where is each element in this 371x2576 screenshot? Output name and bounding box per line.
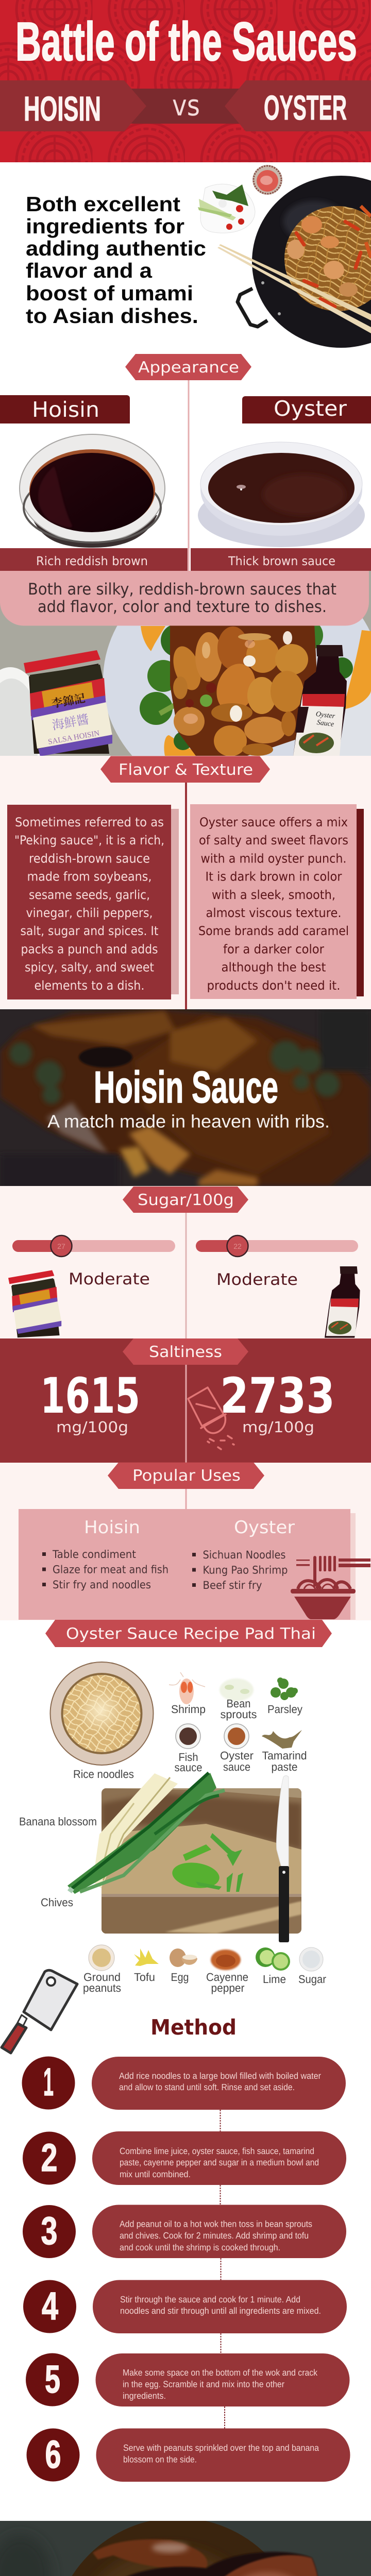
slider: oyster sugar: 22 xyxy=(233,1242,242,1250)
step 1 xyxy=(22,2057,346,2110)
intro text: Both excellent xyxy=(26,192,180,216)
hoisin column heading: Hoisin xyxy=(84,1517,140,1538)
hoisin description card: "Peking sauce", it is a rich, xyxy=(14,833,164,848)
ingredient: tofu xyxy=(134,1948,159,1984)
hoisin caption xyxy=(0,548,188,571)
oyster salt value: 2733 xyxy=(220,1368,335,1425)
oyster description card: for a darker color xyxy=(223,942,324,956)
step card: Serve with peanuts sprinkled over the top and banana xyxy=(123,2443,319,2453)
hoisin uses list: Stir fry and noodles xyxy=(53,1579,151,1591)
section banner: recipe xyxy=(45,1620,332,1647)
icon: herb plate xyxy=(198,184,255,233)
bottle: oyster sauce xyxy=(293,645,347,756)
hoisin salt value: 1615 xyxy=(40,1368,140,1425)
oyster description card: with a sleek, smooth, xyxy=(212,888,335,902)
ingredient: egg: Egg xyxy=(171,1971,189,1984)
jar: hoisin sauce small xyxy=(8,1270,61,1337)
step connectors xyxy=(221,2110,225,2429)
ingredient: oyster sauce: Oyster xyxy=(220,1749,254,1762)
step card: ingredients. xyxy=(123,2391,166,2401)
slider: hoisin sugar xyxy=(12,1235,175,1257)
jar product name: SALSA HOISIN xyxy=(47,729,100,747)
oyster uses list: Sichuan Noodles xyxy=(203,1549,285,1561)
ingredient: cayenne pepper: Cayenne xyxy=(206,1971,248,1984)
ingredient: fish sauce: Fish xyxy=(178,1751,198,1764)
bottle label: Sauce xyxy=(316,719,334,728)
ingredient: oyster sauce xyxy=(220,1724,254,1773)
hoisin label: HOISIN xyxy=(24,90,101,128)
section banner xyxy=(108,1463,264,1489)
ingredient: tamarind paste: Tamarind xyxy=(262,1749,307,1762)
step number: 5 xyxy=(45,2358,60,2401)
oyster caption xyxy=(191,548,371,571)
uses card xyxy=(19,1509,356,1620)
bottle: oyster sauce small xyxy=(325,1266,360,1338)
ingredient: banana blossom xyxy=(93,1773,178,1888)
hoisin caption: Rich reddish brown xyxy=(36,554,148,568)
step card xyxy=(96,2429,350,2482)
jar: hoisin sauce xyxy=(24,650,112,756)
icon: chopsticks xyxy=(217,244,371,333)
step number: 3 xyxy=(41,2209,58,2253)
ingredient: lime: Lime xyxy=(263,1973,286,1986)
oyster description card: although the best xyxy=(222,960,326,975)
step card: blossom on the side. xyxy=(123,2454,197,2465)
hoisin uses list: Table condiment xyxy=(52,1548,136,1561)
broccoli xyxy=(140,625,353,750)
intro text: flavor and a xyxy=(26,259,153,282)
step 5 xyxy=(26,2353,349,2406)
step 6 xyxy=(27,2429,350,2482)
ingredient: ground peanuts xyxy=(83,1945,121,1994)
section: sugar per 100g xyxy=(0,1186,371,1338)
divider xyxy=(185,1213,187,1338)
oyster description card: almost viscous texture. xyxy=(206,906,341,920)
oyster description card: Oyster sauce offers a mix xyxy=(199,815,348,829)
ingredient: tamarind paste: paste xyxy=(271,1760,298,1773)
section banner xyxy=(100,756,270,783)
section banner: Flavor & Texture xyxy=(119,761,253,779)
step card: Add peanut oil to a hot wok then toss in bean sprouts xyxy=(120,2218,312,2229)
ingredient: bean sprouts: Bean xyxy=(227,1697,250,1710)
summary text xyxy=(28,580,336,616)
step card: and cook until the shrimp is cooked through. xyxy=(120,2242,280,2252)
ingredient: fish sauce xyxy=(174,1724,202,1774)
jar label: 海鮮醬 xyxy=(51,713,90,733)
bottle label: Oyster xyxy=(315,710,335,720)
ingredient: sugar: Sugar xyxy=(298,1973,326,1986)
step card xyxy=(92,2057,346,2110)
intro text: to Asian dishes. xyxy=(26,304,198,328)
section banner: Sugar/100g xyxy=(138,1191,234,1209)
step card: noodles and stir through until all ingredients are mixed. xyxy=(120,2306,321,2316)
step number: 1 xyxy=(43,2060,54,2104)
heading: Hoisin Sauce xyxy=(94,1062,278,1112)
icon: chili dip dish xyxy=(252,165,282,195)
step card: Add rice noodles to a large bowl filled with boiled water xyxy=(119,2071,321,2081)
step number xyxy=(22,2057,75,2109)
label: banana blossom: Banana blossom xyxy=(19,1815,97,1828)
section banner: Saltiness xyxy=(149,1343,222,1361)
hoisin description card: Sometimes referred to as xyxy=(15,815,164,829)
ingredient: sugar xyxy=(298,1947,326,1986)
section banner xyxy=(123,1187,248,1213)
ingredient: ground peanuts: peanuts xyxy=(83,1981,121,1994)
section banner: recipe: Oyster Sauce Recipe Pad Thai xyxy=(66,1625,316,1643)
vs label: vs xyxy=(172,89,200,123)
step number xyxy=(23,2280,76,2333)
oyster salt unit: mg/100g xyxy=(242,1418,314,1436)
hoisin description card: salt, sugar and spices. It xyxy=(21,924,159,938)
step number xyxy=(23,2205,76,2258)
step number xyxy=(26,2353,79,2406)
ingredient: egg xyxy=(170,1948,197,1984)
heading: method: Method xyxy=(150,2015,237,2040)
hoisin uses list xyxy=(42,1548,168,1591)
oyster description card xyxy=(190,804,364,999)
photo: chicken dish with sauces xyxy=(0,571,371,756)
oyster caption: Thick brown sauce xyxy=(228,554,335,568)
photo: oyster sauce white dish xyxy=(197,442,367,548)
ingredient: tofu: Tofu xyxy=(134,1971,155,1984)
step number: 6 xyxy=(45,2433,61,2477)
subheading: A match made in heaven with ribs. xyxy=(47,1112,330,1131)
step number xyxy=(27,2429,79,2481)
ingredient: ground peanuts: Ground xyxy=(83,1971,121,1984)
oyster description card: of salty and sweet flavors xyxy=(199,833,348,848)
oyster uses list: Beef stir fry xyxy=(203,1579,262,1591)
ingredient: oyster sauce: sauce xyxy=(223,1760,250,1773)
step card: Make some space on the bottom of the wok and crack xyxy=(123,2367,317,2378)
ingredient: parsley xyxy=(267,1677,302,1716)
jar brand: 李錦記 xyxy=(50,692,86,710)
step number: 2 xyxy=(41,2136,58,2180)
step 4 xyxy=(23,2280,347,2333)
hoisin description card: reddish-brown sauce xyxy=(29,851,150,866)
ingredient: lime xyxy=(256,1947,290,1986)
step card xyxy=(92,2205,346,2258)
ingredient: rice noodles xyxy=(50,1662,154,1781)
bowl of rice xyxy=(0,667,44,756)
ingredient: bean sprouts: sprouts xyxy=(221,1708,257,1721)
intro text: ingredients for xyxy=(26,214,184,238)
oyster uses list xyxy=(192,1549,288,1591)
hoisin description card: vinegar, chili peppers, xyxy=(26,906,153,920)
chopped chives xyxy=(171,1833,243,1892)
section: popular uses xyxy=(0,1463,371,1620)
section: saltiness xyxy=(0,1338,371,1463)
oyster tab: Oyster xyxy=(274,396,347,421)
cutting board xyxy=(102,1788,301,1934)
icon: cleaver xyxy=(2,1970,77,2053)
section: flavor and texture xyxy=(0,756,371,1009)
section banner xyxy=(123,1338,248,1365)
step card: and chives. Cook for 2 minutes. Add shrimp and tofu xyxy=(120,2230,309,2241)
slider: hoisin sugar: 27 xyxy=(57,1242,65,1250)
oyster description card: It is dark brown in color xyxy=(205,870,342,884)
step 3 xyxy=(23,2205,346,2258)
summary text: Both are silky, reddish-brown sauces that xyxy=(28,580,336,599)
hoisin uses list: Glaze for meat and fish xyxy=(53,1563,168,1575)
hoisin description card: elements to a dish. xyxy=(34,978,144,993)
ingredient: bean sprouts xyxy=(220,1679,257,1721)
hoisin description card xyxy=(7,805,179,999)
step card: in the egg. Scramble it and mix into the other xyxy=(123,2379,284,2389)
icon: salt shaker xyxy=(188,1387,234,1449)
summary text: add flavor, color and texture to dishes. xyxy=(38,598,327,616)
oyster uses list: Kung Pao Shrimp xyxy=(203,1564,288,1577)
section banner xyxy=(125,354,251,380)
ingredient: cayenne pepper xyxy=(206,1950,248,1994)
step card: Stir through the sauce and cook for 1 minute. Add xyxy=(120,2294,300,2304)
versus ribbon xyxy=(0,80,371,131)
divider xyxy=(185,783,187,1009)
intro text: boost of umami xyxy=(26,281,193,305)
oyster description card: Some brands add caramel xyxy=(198,924,349,938)
hoisin tab xyxy=(0,395,130,423)
divider xyxy=(185,1489,187,1510)
chicken pieces xyxy=(168,623,317,756)
divider xyxy=(185,1365,187,1463)
ingredient: parsley: Parsley xyxy=(267,1703,302,1716)
label: chives: Chives xyxy=(41,1896,73,1909)
oyster description card: products don't need it. xyxy=(207,978,340,993)
oranges xyxy=(141,626,371,756)
step number xyxy=(23,2132,76,2184)
step card xyxy=(96,2353,349,2406)
divider xyxy=(188,380,190,571)
ingredient: fish sauce: sauce xyxy=(174,1761,202,1774)
intro text xyxy=(26,192,206,328)
pink summary panel xyxy=(0,571,369,625)
hoisin description card: sesame seeds, garlic, xyxy=(29,888,150,902)
step card xyxy=(93,2280,347,2333)
slider: oyster sugar xyxy=(196,1235,358,1257)
photo: glazed ribs xyxy=(0,1009,371,1190)
hoisin description card: spicy, salty, and sweet xyxy=(25,960,154,975)
section banner: Popular Uses xyxy=(132,1467,241,1485)
step 2 xyxy=(23,2131,346,2185)
section banner: Appearance xyxy=(138,359,239,377)
oyster rating: Moderate xyxy=(216,1270,298,1289)
oyster column heading: Oyster xyxy=(234,1517,295,1538)
hoisin description card: made from soybeans, xyxy=(27,870,151,884)
oyster tab xyxy=(242,396,371,423)
icon: wok with noodles xyxy=(217,176,371,348)
hoisin rating: Moderate xyxy=(69,1270,150,1289)
hoisin description card: packs a punch and adds xyxy=(21,942,158,956)
ingredient: tamarind paste xyxy=(262,1730,307,1773)
section: appearance xyxy=(0,354,371,571)
step card xyxy=(92,2131,346,2185)
hoisin salt unit: mg/100g xyxy=(56,1418,128,1436)
ingredient: shrimp xyxy=(169,1672,206,1716)
hoisin tab: Hoisin xyxy=(32,397,99,422)
ingredient: cayenne pepper: pepper xyxy=(211,1981,244,1994)
step card: paste, cayenne pepper and sugar in a medium bowl and xyxy=(120,2157,319,2167)
photo: peking duck xyxy=(0,2518,371,2576)
ingredient: chives xyxy=(68,1773,225,1894)
icon: noodle bowl with chopsticks xyxy=(291,1556,370,1619)
header banner xyxy=(0,0,371,162)
icon: chef knife xyxy=(277,1775,289,1942)
intro text: adding authentic xyxy=(26,236,206,260)
oyster description card: with a mild oyster punch. xyxy=(201,851,346,866)
step card: mix until combined. xyxy=(120,2169,191,2179)
step card: Combine lime juice, oyster sauce, fish sauce, tamarind xyxy=(120,2146,314,2156)
step number: 4 xyxy=(42,2284,58,2328)
ingredient: shrimp: Shrimp xyxy=(171,1703,206,1716)
step card: and allow to stand until soft. Rinse and set aside. xyxy=(119,2082,295,2092)
ingredient: rice noodles: Rice noodles xyxy=(73,1768,134,1781)
photo: hoisin sauce glass bowl xyxy=(20,434,165,548)
